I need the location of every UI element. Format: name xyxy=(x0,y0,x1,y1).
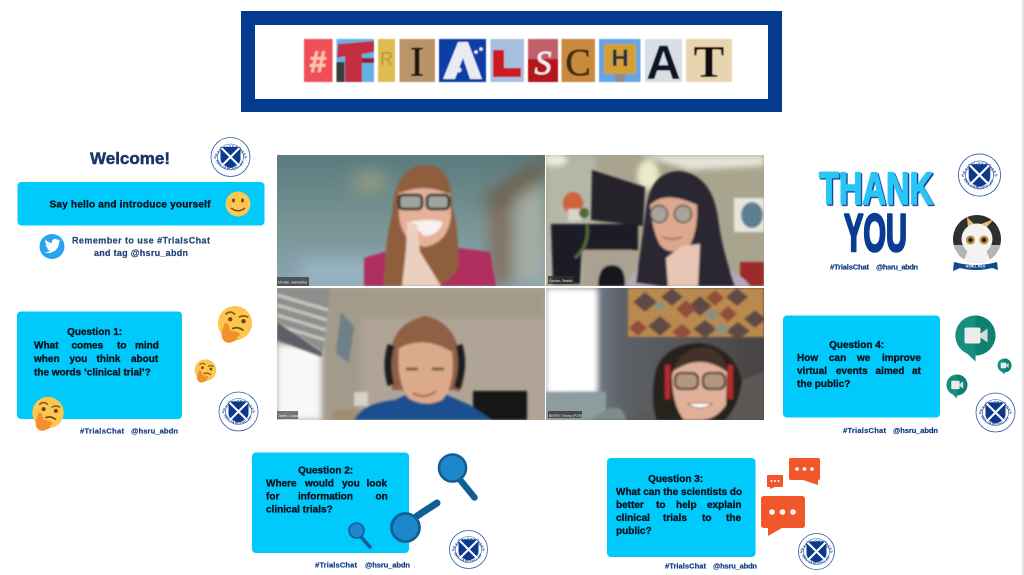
tags: thank you xyxy=(830,262,918,272)
welcome heading: Welcome! xyxy=(90,149,170,168)
logo: welcome xyxy=(210,137,250,177)
tags: question 2: #TrialsChat xyxy=(315,560,357,570)
icon: chat bubble top xyxy=(789,458,820,485)
logo: question 1: HEALTH•SERVICES xyxy=(222,400,256,414)
icon: meet large xyxy=(955,315,996,362)
letter tile: R: R xyxy=(380,49,393,69)
word: thank: THANK xyxy=(819,163,933,214)
name label xyxy=(548,276,574,284)
letter tile: hash xyxy=(304,39,332,82)
tags: question 2 xyxy=(315,560,410,570)
name label: Jamie, Louise xyxy=(278,414,299,418)
logo: thank you: HEALTH•SERVICES xyxy=(961,162,998,177)
logo: thank you: RESEARCH•UNIT xyxy=(964,178,994,189)
question 3 text: Question 3: xyxy=(648,474,703,485)
question 2 text: clinical trials? xyxy=(266,504,333,516)
logo: question 2: HEALTH•SERVICES xyxy=(452,538,486,552)
question 3 text: trials xyxy=(663,513,687,524)
letter tile: T xyxy=(336,39,374,82)
name label: Meman, Samantha xyxy=(278,280,307,284)
name label: Gordon, Beatriz xyxy=(549,279,573,283)
logo: question 1: RESEARCH•UNIT xyxy=(224,414,252,424)
icon: chat bubble small xyxy=(767,475,783,489)
word: you: YOU xyxy=(844,204,907,263)
letter tile: I xyxy=(400,39,435,86)
question 2 text: on xyxy=(376,492,388,502)
logo: thank you xyxy=(958,154,1001,196)
letter tile: H: H xyxy=(611,45,629,72)
tags: thank you: #TrialsChat xyxy=(830,262,869,272)
background edge xyxy=(1022,0,1024,575)
photo: participant top right xyxy=(543,154,764,286)
icon: magnifier middle xyxy=(392,503,437,542)
question 4 text: can xyxy=(829,353,846,364)
logo: question 3: RESEARCH•UNIT xyxy=(802,554,830,564)
question 4 text: the public? xyxy=(797,379,850,390)
icon: thinking face bottom xyxy=(32,397,64,431)
question 4 text: improve xyxy=(882,353,921,364)
question 3 text: public? xyxy=(616,526,652,537)
icon: meet small left xyxy=(946,374,967,398)
question 4 text: at xyxy=(912,366,922,377)
twitter reminder: and tag @hsru_abdn xyxy=(94,248,188,258)
logo: question 4: HEALTH•SERVICES xyxy=(978,400,1012,414)
icon: magnifier top xyxy=(439,454,474,498)
question 4 text: virtual xyxy=(797,366,827,377)
photo: participant top left xyxy=(277,155,545,286)
question 3 text: explain xyxy=(707,500,741,511)
question 2 text: look xyxy=(366,478,387,490)
tags: question 4 xyxy=(843,426,938,435)
logo: welcome: HEALTH•SERVICES xyxy=(214,145,248,159)
question 1 text: to xyxy=(117,340,126,352)
panel: welcome box xyxy=(18,182,264,226)
question 3 text: help xyxy=(676,500,697,511)
name label xyxy=(277,277,309,286)
tags: question 3: #TrialsChat xyxy=(665,562,706,570)
question 4 text: Question 4: xyxy=(829,340,884,351)
name label: BERRY, Emma (PGR) xyxy=(549,414,582,418)
letter tile: A xyxy=(439,39,486,82)
logo: question 4 xyxy=(976,392,1016,432)
question 1 text: comes xyxy=(72,340,104,352)
tags: thank you: @hsru_abdn xyxy=(876,262,918,272)
letter tile: A second: A xyxy=(646,37,681,90)
letter tile: hash: # xyxy=(310,46,327,79)
tags: question 4: #TrialsChat xyxy=(843,426,886,435)
question 2 text: would xyxy=(304,478,334,490)
question 4 text: How xyxy=(797,353,818,364)
logo: question 4: RESEARCH•UNIT xyxy=(980,415,1009,426)
name label xyxy=(548,411,582,418)
title banner xyxy=(241,11,782,112)
logo: question 3: HEALTH•SERVICES xyxy=(800,540,834,554)
logo: welcome: RESEARCH•UNIT xyxy=(216,160,244,170)
mascot badge xyxy=(953,215,1001,271)
letter tile: C: C xyxy=(565,42,591,84)
question 1 text: about xyxy=(131,354,159,365)
question 2 text: Question 2: xyxy=(298,466,353,476)
panel: question 4 xyxy=(783,316,940,418)
logo: question 2 xyxy=(449,530,488,569)
icon: thinking face small xyxy=(195,359,216,383)
tags: question 3 xyxy=(665,562,757,570)
mascot badge: HSRU_PEG xyxy=(966,264,986,268)
banner letters xyxy=(304,36,732,90)
question 3 text: What can the scientists do xyxy=(616,487,742,498)
panel: question 1 xyxy=(17,312,182,419)
name label xyxy=(277,411,299,419)
letter tile: I: I xyxy=(410,40,424,86)
question 1 text: when xyxy=(33,354,60,365)
logo: question 2: RESEARCH•UNIT xyxy=(454,552,482,562)
letter tile: T second: T xyxy=(694,36,724,87)
question 1 text: Question 1: xyxy=(67,327,122,338)
tags: question 1 xyxy=(80,426,178,436)
icon: magnifier small xyxy=(349,523,370,547)
letter tile: T second xyxy=(686,36,732,87)
question 1 text: mind xyxy=(135,340,159,352)
question 4 text: events xyxy=(836,366,868,377)
tags: question 2: @hsru_abdn xyxy=(365,560,410,570)
logo: question 3 xyxy=(798,533,835,570)
question 1 text: you xyxy=(70,354,87,365)
photo: participant bottom left xyxy=(277,288,545,420)
tags: question 3: @hsru_abdn xyxy=(713,562,757,570)
question 3 text: better xyxy=(616,500,644,511)
question 2 text: for xyxy=(266,492,279,502)
letter tile: H xyxy=(599,39,640,82)
icon: thinking face large xyxy=(218,306,252,343)
letter tile: R xyxy=(378,39,395,82)
panel: question 3 xyxy=(607,458,756,557)
icon: chat bubble large xyxy=(761,496,805,536)
question 3 text: clinical xyxy=(616,513,650,524)
panel: question 2 xyxy=(252,452,409,553)
letter tile: S: S xyxy=(534,45,552,82)
question 1 text: What xyxy=(34,340,59,352)
artwork xyxy=(628,288,766,340)
question 3 text: to xyxy=(702,513,711,524)
question 1 text: think xyxy=(96,354,121,365)
icon: twitter xyxy=(40,234,64,259)
question 3 text: to xyxy=(656,500,665,511)
question 4 text: we xyxy=(856,353,871,364)
tags: question 4: @hsru_abdn xyxy=(893,426,938,435)
welcome prompt: Say hello and introduce yourself xyxy=(50,200,211,210)
letter tile: S xyxy=(528,39,558,82)
question 3 text: the xyxy=(726,513,741,524)
tags: question 1: @hsru_abdn xyxy=(131,426,178,436)
question 1 text: the words ‘clinical trial’? xyxy=(34,368,151,378)
question 2 text: information xyxy=(298,492,353,502)
question 2 text: you xyxy=(342,478,360,490)
letter tile: L xyxy=(490,39,524,82)
twitter reminder: Remember to use #TrialsChat xyxy=(72,236,210,246)
question 2 text: Where xyxy=(266,478,297,490)
tags: question 1: #TrialsChat xyxy=(80,426,124,436)
thank you graphic xyxy=(819,163,933,263)
icon: meet small right xyxy=(997,358,1011,374)
icon: smiley xyxy=(226,192,250,216)
photo: participant bottom right xyxy=(546,288,766,420)
logo: question 1 xyxy=(218,392,258,432)
question 4 text: aimed xyxy=(876,366,904,377)
twitter reminder xyxy=(72,236,210,258)
